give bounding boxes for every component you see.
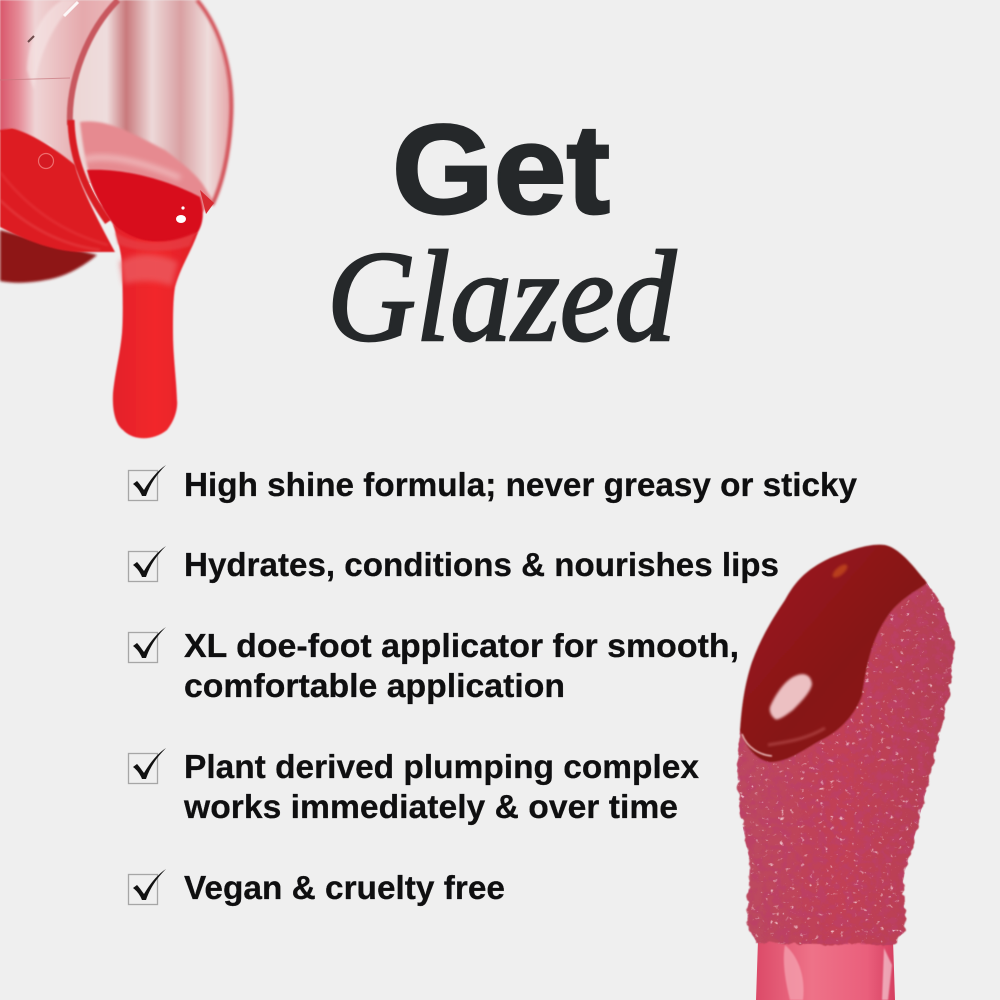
- jar rim right: [197, 0, 231, 205]
- jar shadow underside: [0, 230, 97, 283]
- jar highlights: [28, 36, 34, 42]
- item 1: High shine formula; never greasy or sticky: [184, 466, 858, 503]
- image: red gloss dripping from glass jar: [0, 0, 232, 438]
- checklist: [128, 465, 858, 906]
- checkbox icon: [128, 465, 166, 500]
- item 5: Vegan & cruelty free: [184, 869, 505, 906]
- item 3: comfortable application: [184, 667, 565, 704]
- title: [327, 98, 677, 369]
- jar red body: [0, 128, 115, 252]
- liquid pool in jar: [87, 170, 203, 244]
- title word: Glazed: Glazed: [327, 225, 677, 369]
- item 4: works immediately & over time: [183, 788, 678, 825]
- gloss blob: [740, 545, 927, 762]
- jar interior: [72, 0, 232, 212]
- item 4: Plant derived plumping complex: [184, 748, 700, 785]
- jar rim left: [70, 0, 118, 125]
- sponge texture: [737, 582, 954, 945]
- bubble: [38, 154, 54, 168]
- applicator stem: [756, 940, 895, 1000]
- checkbox icon: [128, 748, 166, 784]
- item 3: XL doe-foot applicator for smooth,: [184, 627, 739, 664]
- gloss highlight: [770, 674, 812, 719]
- drip: [113, 224, 198, 438]
- checkbox icon: [128, 869, 166, 904]
- title word: Get: Get: [392, 98, 610, 240]
- checkbox icon: [128, 546, 166, 582]
- item 2: Hydrates, conditions & nourishes lips: [184, 546, 779, 583]
- gloss highlight: [176, 215, 186, 223]
- item 3: [128, 627, 739, 704]
- item 4: [128, 748, 700, 825]
- checkbox icon: [128, 627, 166, 662]
- sponge tip: [737, 560, 954, 945]
- image: doe-foot applicator with gloss: [730, 545, 960, 1000]
- jar upper glass: [0, 0, 118, 172]
